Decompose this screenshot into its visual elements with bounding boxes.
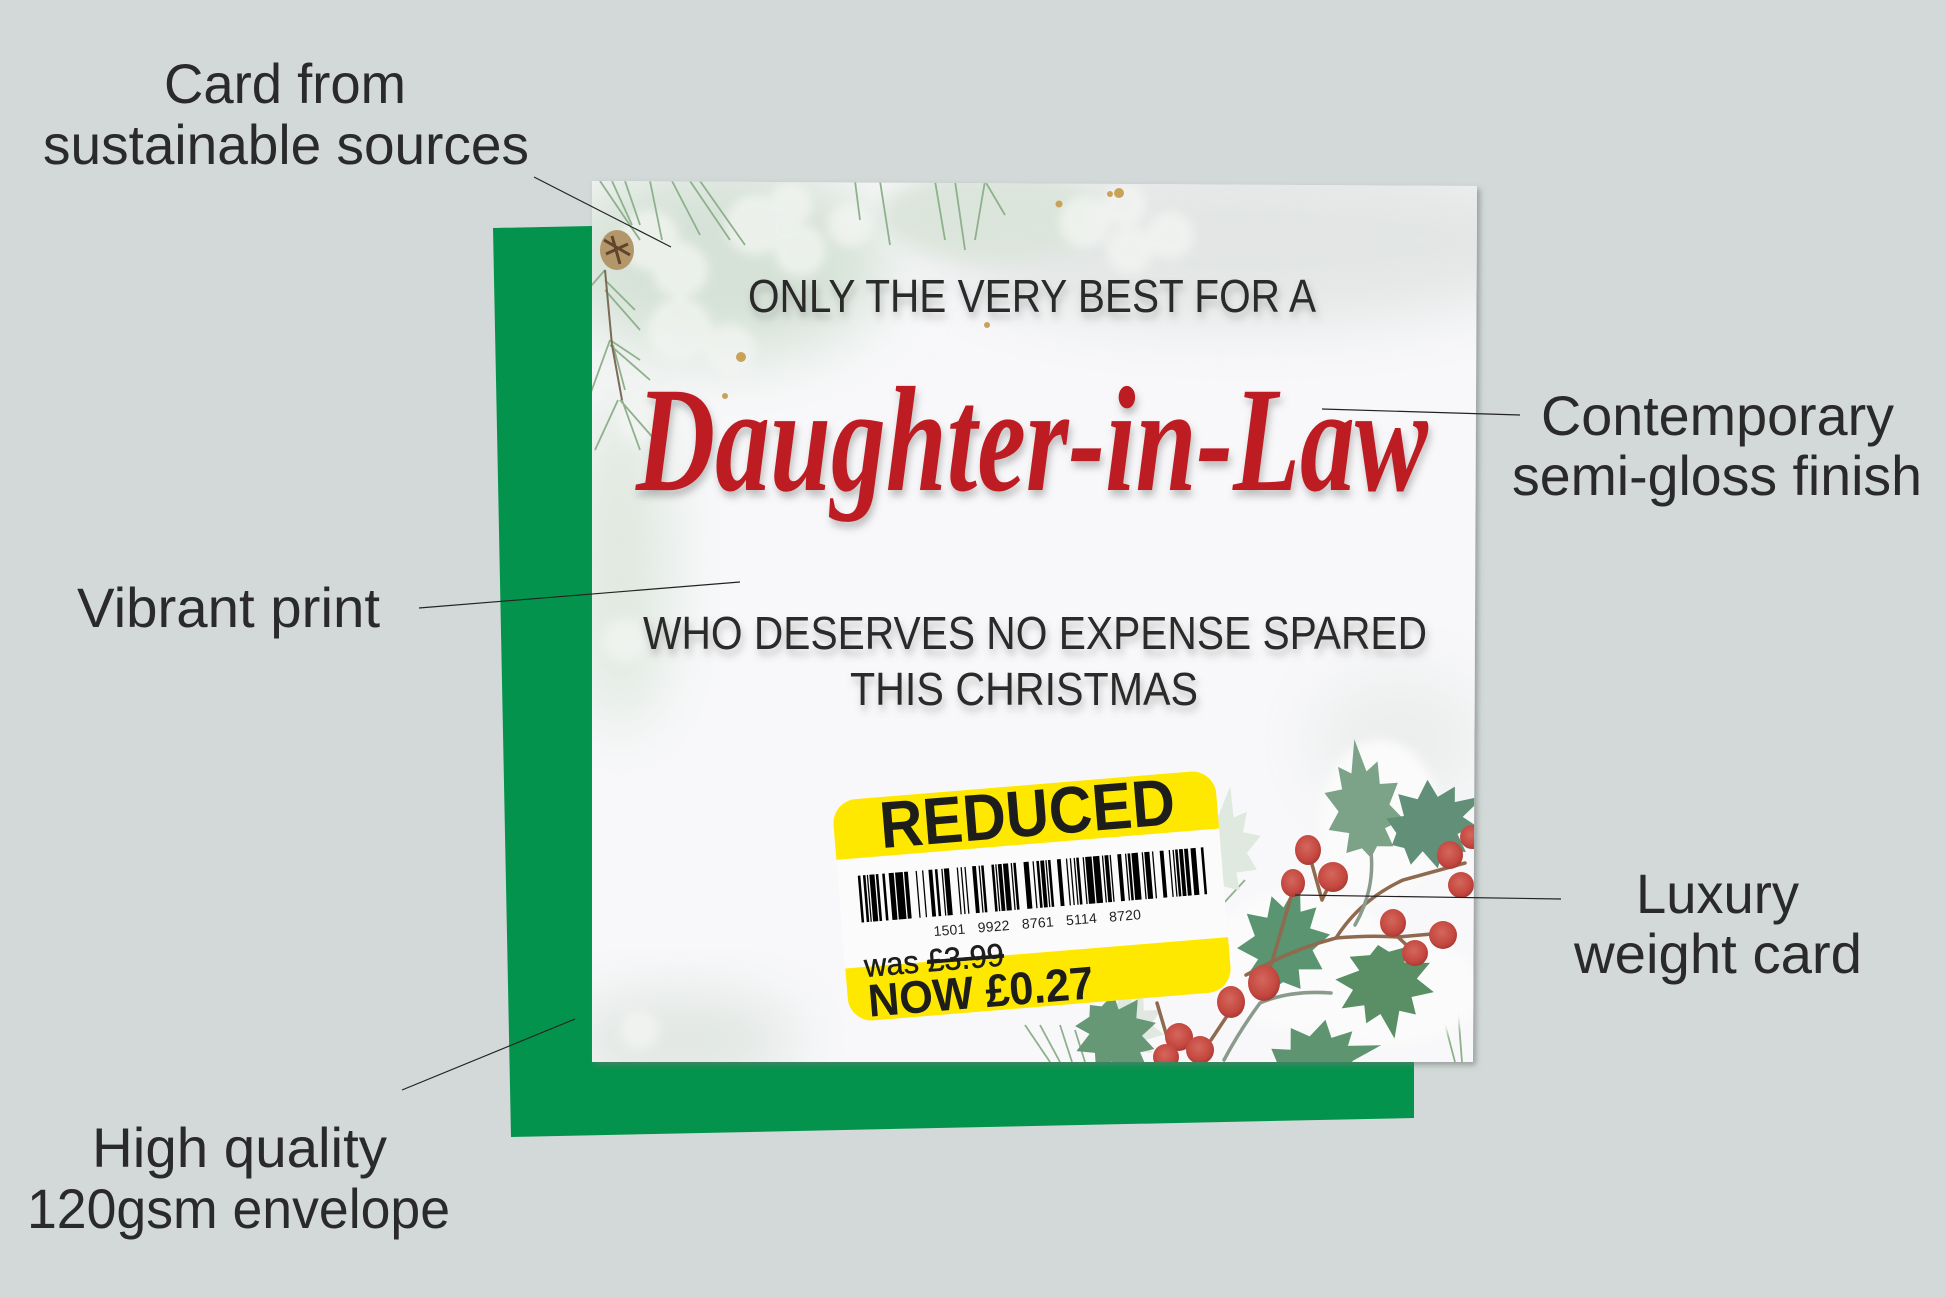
- label: luxury weight card: weight card: [1573, 922, 1862, 985]
- envelope: [493, 226, 1414, 1137]
- pale background leaf: [1218, 786, 1260, 890]
- label: contemporary semi-gloss finish: [1512, 384, 1922, 507]
- berries: [1153, 825, 1484, 1070]
- watercolor background: [550, 155, 1580, 1085]
- gold specks: [722, 188, 1124, 399]
- script title: Daughter-in-Law: [635, 357, 1429, 523]
- holly leaves: [1059, 734, 1504, 1114]
- card message: THIS CHRISTMAS: [850, 663, 1198, 715]
- label: contemporary semi-gloss finish: semi-gloss finish: [1512, 444, 1922, 507]
- pointer: semi-gloss finish: [1322, 409, 1520, 415]
- label: card from sustainable sources: [43, 52, 529, 176]
- pointer: high quality envelope: [402, 1019, 575, 1090]
- reduced heading: REDUCED: [877, 764, 1178, 862]
- card message: [643, 607, 1427, 715]
- label: card from sustainable sources: Card from: [164, 52, 406, 115]
- now price: NOW £0.27: [866, 956, 1095, 1027]
- label: high quality envelope: [27, 1116, 450, 1240]
- label: high quality envelope: High quality: [92, 1116, 387, 1179]
- was price: was £3.99: [862, 937, 1005, 984]
- pointer: sustainable sources: [534, 177, 671, 247]
- label: contemporary semi-gloss finish: Contemporary: [1541, 384, 1894, 447]
- sticker bottom band: [845, 937, 1232, 1022]
- holly branches: [1157, 850, 1465, 1060]
- pine cone: [600, 230, 634, 270]
- white halos behind holly: [1228, 741, 1474, 1039]
- label: luxury weight card: [1573, 862, 1862, 985]
- label: luxury weight card: Luxury: [1636, 862, 1799, 925]
- card message: WHO DESERVES NO EXPENSE SPARED: [643, 607, 1427, 659]
- pointer: luxury weight card: [1295, 895, 1561, 899]
- label: vibrant print: Vibrant print: [77, 576, 380, 639]
- label: card from sustainable sources: sustainable sources: [43, 113, 529, 176]
- label: high quality envelope: 120gsm envelope: [27, 1177, 450, 1240]
- pointer: vibrant print: [419, 582, 740, 608]
- reduced price sticker: [831, 761, 1233, 1028]
- sticker top band: [832, 770, 1219, 860]
- barcode digits: 1501 9922 8761 5114 8720: [933, 906, 1142, 939]
- barcode: [860, 871, 1207, 899]
- pine branches: [570, 181, 1462, 1062]
- card heading: ONLY THE VERY BEST FOR A: [748, 270, 1316, 322]
- greeting card: [592, 181, 1483, 1068]
